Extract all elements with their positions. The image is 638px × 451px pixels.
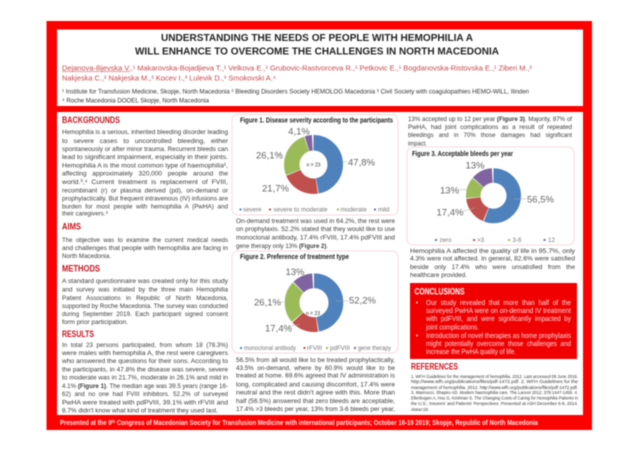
panel: figure 3 acceptable bleeds donut: >3 [477,237,485,244]
text block: prophylaxis and bleeds: 56.5% from all would like to be treated prophylactically, [236,357,395,364]
panel: conclusions: Introduction of novel therapies as home prophylaxis [426,333,571,340]
panel: figure 2 treatment preference donut: 52,2% [349,296,376,306]
text block: prophylaxis and bleeds: 17.4% >3 bleeds per year, 13% from 3-6 bleeds per year, [236,406,395,413]
section: references: REFERENCES [411,362,458,372]
text block: quality of life: healthcare provided. [410,272,467,279]
section: backgrounds [61,115,229,218]
text block: prophylaxis and bleeds [236,357,396,413]
text block: treatment: gene therapy only 13% (Figure 2). [236,243,328,250]
panel: figure 2 treatment preference donut: gene therapy [358,345,392,352]
panel: figure 3 acceptable bleeds donut: 13% [440,186,460,196]
text block: quality of life: beside only 17.4% who were unsatisfied from the [410,264,575,271]
footer [60,419,538,427]
panel: figure 3 acceptable bleeds donut: 3-6 [512,237,522,244]
panel: figure 2 treatment preference donut: 17,4% [265,324,292,334]
panel: figure 1 disease severity donut: Figure 1. Disease severity according to the participants [240,118,393,124]
text block: prophylaxis and bleeds: 43.5% on-demand, where by 60.9% would like to be [236,365,395,372]
section: methods: during September 2019. Each participant signed consent [62,311,228,318]
footer: Presented at the 9 [60,420,120,427]
section: aims [62,222,229,260]
text block: prophylaxis and bleeds: long, complicated and causing discomfort, 17.4% were [236,381,395,388]
panel: figure 3 acceptable bleeds donut: 56,5% [527,194,554,206]
title: WILL ENHANCE TO OVERCOME THE CHALLENGES IN NORTH MACEDONIA [135,46,499,58]
section: methods: supported by Roche Macedonia. The survey was conducted [62,303,228,310]
panel: figure 1 disease severity donut: moderate [340,206,367,214]
authors [62,64,533,82]
panel: conclusions: with pdFVIII, and were significantly impacted by [425,316,571,323]
text block: prophylaxis and bleeds: neutral and the rest didn't agree with this. More than [236,390,395,397]
text block: quality of life [410,248,576,279]
section: backgrounds: their caregivers.⁴ [62,211,108,218]
panel: figure 1 disease severity donut: severe [243,206,262,214]
text block: treatment: on prophylaxis. 52.2% stated that they would like to use [236,226,395,233]
section: references: 3. Mannucci, Shapiro AD. Modern haemophilia care. The Lancet 2012; 379:1447-1456. 4. [411,390,578,395]
section: results: PwHA were treated with pdPVIII, 39.1% with rFVIII and [62,399,228,406]
section: references: Ellenbogen A, Hou G, Krishnan S. The Changing Costs of Caring for Hemophilia Patients in [411,396,579,401]
section: methods: A standard questionnaire was created only for this study [62,278,229,285]
authors: Dejanova-Ilijevska V.,¹ Makarovska-Bojadjieva T.,¹ Velkova E.,¹ Grubovic-Rastvorceva R.,¹ Petkovic E.,¹ Bogdanovska-Ristovska E.,¹ Ziberi M.,² [62,64,533,72]
footer: th [112,419,115,424]
text block: quality of life: 4.3% were not affected. In general, 82.6% were satisfied [410,256,575,263]
panel: figure 1 disease severity donut: severe to moderate [274,206,328,214]
section: results: 4.1% (Figure 1). The median age was 39.5 years (range 16- [62,383,228,390]
panel: figure 1 disease severity donut: 4,1% [288,126,310,138]
panel: figure 2 treatment preference donut: rFVIII [307,345,322,352]
section: backgrounds: Hemophilia A is the most common type of haemophilia¹, [62,162,228,169]
panel: figure 1 disease severity donut: n = 23 [306,162,321,168]
text block: treatment: monoclonal antibody, 17.4% rFVIII, 17.4% pdFVIII and [236,234,395,242]
panel: figure 1 disease severity donut: 26,1% [256,150,283,162]
section: backgrounds: to severe cases to uncontrolled bleeding, either [62,138,229,145]
panel: conclusions: increase the PwHA quality of life. [426,349,516,356]
section: aims: The objective was to examine the current medical needs [62,237,229,244]
text block: joint complications: impact. [408,140,427,147]
panel: figure 2 treatment preference donut: Figure 2. Preference of treatment type [240,254,349,261]
section: aims: North Macedonia. [62,253,111,260]
panel: figure 1 disease severity donut: mild [378,206,390,214]
section: aims: and challenges that people with hemophilia are facing in [62,245,228,252]
affiliations [62,90,529,105]
section: methods: and survey was initiated by the three main Hemophilia [62,286,228,293]
section: results: In total 23 persons participated, from whom 18 (78.3%) [62,342,228,349]
section: references: Abstract 195 [411,407,428,412]
panel: conclusions [410,283,577,359]
affiliations: ¹ Institute for Transfusion Medicine, Skopje, North Macedonia ² Bleeding Disorders Society HEMOLOG Macedonia ³ Civil Society with coagulopathies HEMO-WILL, Ilinden [62,90,529,96]
section: references: management of hemophilia. 2012. http://www.wfh.org/publications/files/pdf-1472.pdf. [411,385,578,390]
panel: conclusions: joint complications. [425,324,479,332]
text block: treatment: On-demand treatment was used in 64.2%, the rest were [236,218,395,225]
panel: figure 3 acceptable bleeds donut: 12 [548,237,555,244]
title [135,32,499,58]
panel: figure 1 disease severity donut: 21,7% [262,184,289,194]
panel: figure 3 acceptable bleeds donut: 13% [465,160,485,172]
section: references: 1. WFH Guidelines for the management of hemophilia. 2012. Last accessed 08 June 2016. [411,374,578,379]
text block: joint complications [408,116,572,147]
panel: figure 3 acceptable bleeds donut: 17,4% [436,208,464,218]
section: methods: METHODS [62,264,100,274]
section: results: were males with hemophilia A, the rest were caregivers [61,350,229,357]
section: references: http://www.wfh.org/publications/files/pdf-1472.pdf. 2. WFH Guidelines for the [411,379,579,384]
red poster frame [46,21,592,430]
section: results: 62) and no one had FVIII inhibitors. 52.2% of surveyed [62,391,228,398]
text block: joint complications: 13% accepted up to 12 per year (Figure 3). Majority, 87% of [408,116,572,123]
section: results: to moderate was in 21.7%, moderate in 26.1% and mild in [62,375,228,382]
panel: figure 2 treatment preference donut: 26,1% [254,298,281,308]
section: results: who answered the questions for their sons. According to [61,358,228,365]
panel: conclusions: might potentially overcome those challenges and [426,341,571,348]
section: results: the participants, in 47.8% the disease was severe, severe [62,367,228,374]
section: backgrounds: BACKGROUNDS [62,115,120,125]
panel: figure 2 treatment preference donut: monoclonal antibody [244,345,297,352]
panel: figure 2 treatment preference donut [232,251,398,353]
section: backgrounds: recombinant (r) or plasma derived (pd), on-demand or [62,187,229,194]
affiliations: ⁴ Roche Macedonia DOOEL Skopje, North Macedonia [62,98,210,105]
footer: Congress of Macedonian Society for Transfusion Medicine with international participants; October 16-19 2019; Skopje, Republic of North Macedonia [115,420,538,427]
section: backgrounds: lead to significant impairment, especially in their joints. [62,154,228,161]
section: references [411,362,579,412]
text block: joint complications: bleedings and in 70% those damages had significant [408,132,572,139]
section: backgrounds: affecting approximately 320,000 people around the [62,170,228,177]
panel: figure 1 disease severity donut [232,114,398,215]
panel: conclusions: CONCLUSIONS [414,286,464,296]
panel: figure 2 treatment preference donut: pdFVIII [330,345,350,352]
section: methods [62,264,229,326]
section: methods: Patient Associations in Republic of North Macedonia, [62,295,228,302]
text block: prophylaxis and bleeds: half (56.5%) answered that zero bleeds are acceptable, [236,398,395,405]
section: results: RESULTS [62,329,94,339]
panel: figure 1 disease severity donut: 47,8% [348,158,375,168]
text block: quality of life: Hemophilia A affected the quality of life in 95.7%, only [410,248,576,255]
section: results: 8.7% didn't know what kind of treatment they used last. [62,408,218,415]
panel: conclusions: surveyed PwHA were on on-demand IV treatment [426,308,571,315]
title: UNDERSTANDING THE NEEDS OF PEOPLE WITH HEMOPHILIA A [161,32,473,44]
panel: figure 3 acceptable bleeds donut: Figure 3. Acceptable bleeds per year [412,151,513,158]
section: methods: form prior participation. [62,319,128,326]
panel: figure 2 treatment preference donut: n = 23 [306,311,320,317]
section: results [61,329,229,415]
section: backgrounds: world.³,⁴ Current treatment is replacement of FVIII, [61,179,228,186]
panel: figure 3 acceptable bleeds donut: zero [440,237,452,244]
section: backgrounds: spontaneously or after minor trauma. Recurrent bleeds can [62,146,228,153]
text block: joint complications: PwHA, had joint complications as a result of repeated [408,124,572,131]
text block: prophylaxis and bleeds: treated at home. 69.6% agreed that IV administration is [236,373,396,380]
authors: Nakjeska C.,² Nakjeska M.,² Kocev I.,³ Lulevik D.,³ Smokovski A.⁴ [62,74,276,82]
section: references: the U.S.: Insurers' and Patients' Perspectives. Presented at ASH December 6-9, 2014. [411,401,578,406]
section: aims: AIMS [62,222,81,232]
section: backgrounds: Hemophilia is a serious, inherited bleeding disorder leading [62,129,228,136]
section: backgrounds: prophylactically. But frequent intravenous (IV) infusions are [62,196,228,203]
text block: treatment [236,218,395,250]
section: backgrounds: burden for most people with hemophilia A (PwHA) and [62,203,228,210]
panel: conclusions: Our study revealed that more than half of the [426,300,571,307]
panel: figure 3 acceptable bleeds donut [407,147,574,245]
panel: figure 2 treatment preference donut: 13% [285,267,305,278]
